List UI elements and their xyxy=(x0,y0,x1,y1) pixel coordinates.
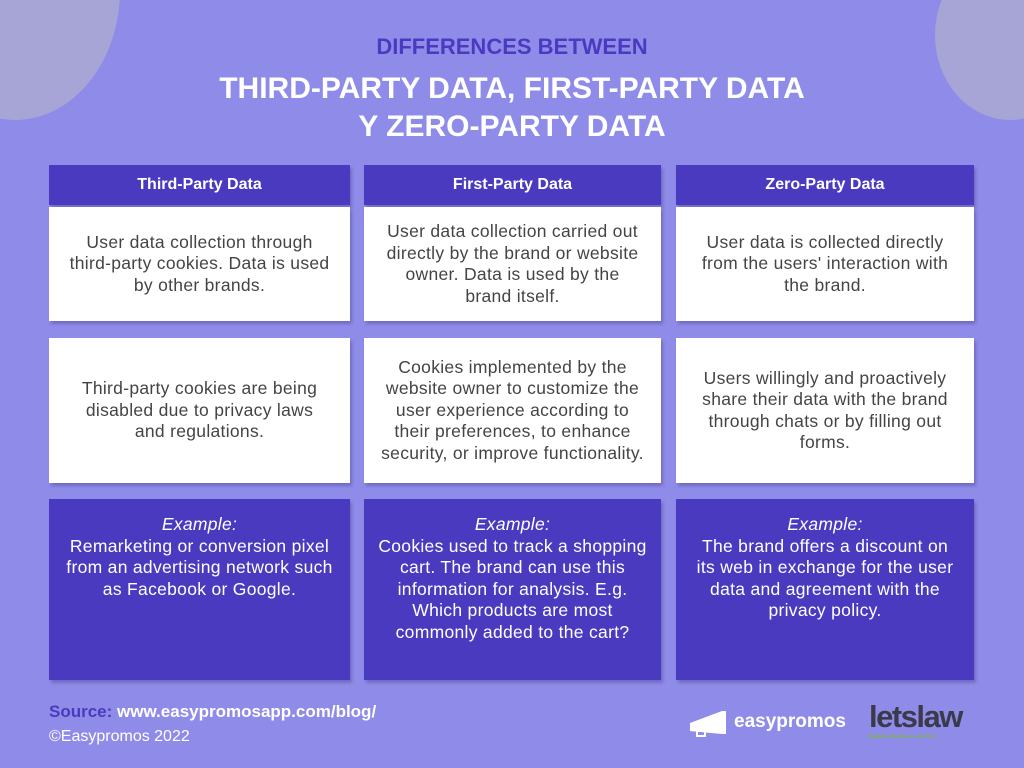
panel: first example: information for analysis. E.g. xyxy=(398,578,627,598)
text: zero sharing: share their data with the brand xyxy=(702,389,948,409)
title: differences between: DIFFERENCES BETWEEN xyxy=(376,34,648,59)
text: zero sharing xyxy=(676,338,974,483)
text: third cookies: disabled due to privacy laws xyxy=(86,400,313,420)
panel: third-party header xyxy=(49,165,350,205)
panel: third-party header: Third-Party Data xyxy=(137,176,262,193)
panel: zero example: privacy policy. xyxy=(768,600,882,620)
text: third cookies: Third-party cookies are being xyxy=(82,378,317,398)
panel: zero-party header xyxy=(676,165,974,205)
text: third cookies: and regulations. xyxy=(135,421,264,441)
panel: zero example: The brand offers a discount on xyxy=(702,536,948,556)
logo: easypromos xyxy=(690,711,846,737)
title: main: Y ZERO-PARTY DATA xyxy=(358,110,666,143)
panel: first example: Cookies used to track a shopping xyxy=(378,536,647,556)
text: first definition: owner. Data is used by the xyxy=(405,264,620,284)
footer: source: Source: www.easypromosapp.com/blog/ xyxy=(49,702,376,721)
text: third definition xyxy=(49,207,350,321)
text: first definition xyxy=(364,207,661,321)
text: third cookies xyxy=(49,338,350,483)
panel: third example xyxy=(49,499,350,680)
text: first cookies: their preferences, to enhance xyxy=(394,421,631,441)
text: zero sharing: through chats or by filling out xyxy=(708,410,942,430)
panel: zero example: data and agreement with the xyxy=(710,578,940,598)
panel: third example: Example: xyxy=(162,514,237,534)
logo: letslaw: letslaw xyxy=(869,699,962,734)
panel: first example: Which products are most xyxy=(412,600,613,620)
text: zero definition: User data is collected directly xyxy=(707,232,943,252)
panel: third example: from an advertising network such xyxy=(66,557,333,577)
text: first cookies: website owner to customize the xyxy=(386,378,639,398)
text: first definition: directly by the brand or website xyxy=(387,242,638,262)
text: first cookies: security, or improve functionality. xyxy=(381,443,644,463)
logo: easypromos: easypromos xyxy=(734,711,846,732)
text: zero definition xyxy=(676,207,974,321)
panel: first example: Example: xyxy=(475,514,550,534)
title: main: THIRD-PARTY DATA, FIRST-PARTY DATA xyxy=(219,72,805,105)
panel: first example xyxy=(364,499,661,680)
text: first definition: User data collection carried out xyxy=(387,221,638,241)
text: zero definition: the brand. xyxy=(784,275,866,295)
panel: first-party header xyxy=(364,165,661,205)
logo: letslaw: Digital & Business Law Firm xyxy=(869,734,936,740)
text: third definition: User data collection through xyxy=(86,232,313,252)
text: zero sharing: Users willingly and proactively xyxy=(704,368,946,388)
panel: zero-party header: Zero-Party Data xyxy=(765,176,885,193)
text: first cookies xyxy=(364,338,661,483)
panel: third example: as Facebook or Google. xyxy=(103,578,296,598)
panel: first example: commonly added to the cart? xyxy=(396,622,629,642)
text: zero sharing: forms. xyxy=(800,432,850,452)
panel: third example: Remarketing or conversion pixel xyxy=(70,536,329,556)
footer: copyright: ©Easypromos 2022 xyxy=(49,728,190,745)
panel: first-party header: First-Party Data xyxy=(453,176,572,193)
text: third definition: third-party cookies. Data is used xyxy=(70,253,329,273)
text: zero definition: from the users' interaction with xyxy=(702,253,948,273)
panel: zero example xyxy=(676,499,974,680)
panel: zero example: Example: xyxy=(787,514,863,534)
text: first cookies: Cookies implemented by the xyxy=(398,357,627,377)
text: third definition: by other brands. xyxy=(134,275,265,295)
text: first definition: brand itself. xyxy=(465,286,560,306)
panel: zero example: its web in exchange for the user xyxy=(697,557,953,577)
text: first cookies: user experience according to xyxy=(396,400,629,420)
title: main xyxy=(219,72,805,143)
panel: first example: cart. The brand can use this xyxy=(400,557,625,577)
